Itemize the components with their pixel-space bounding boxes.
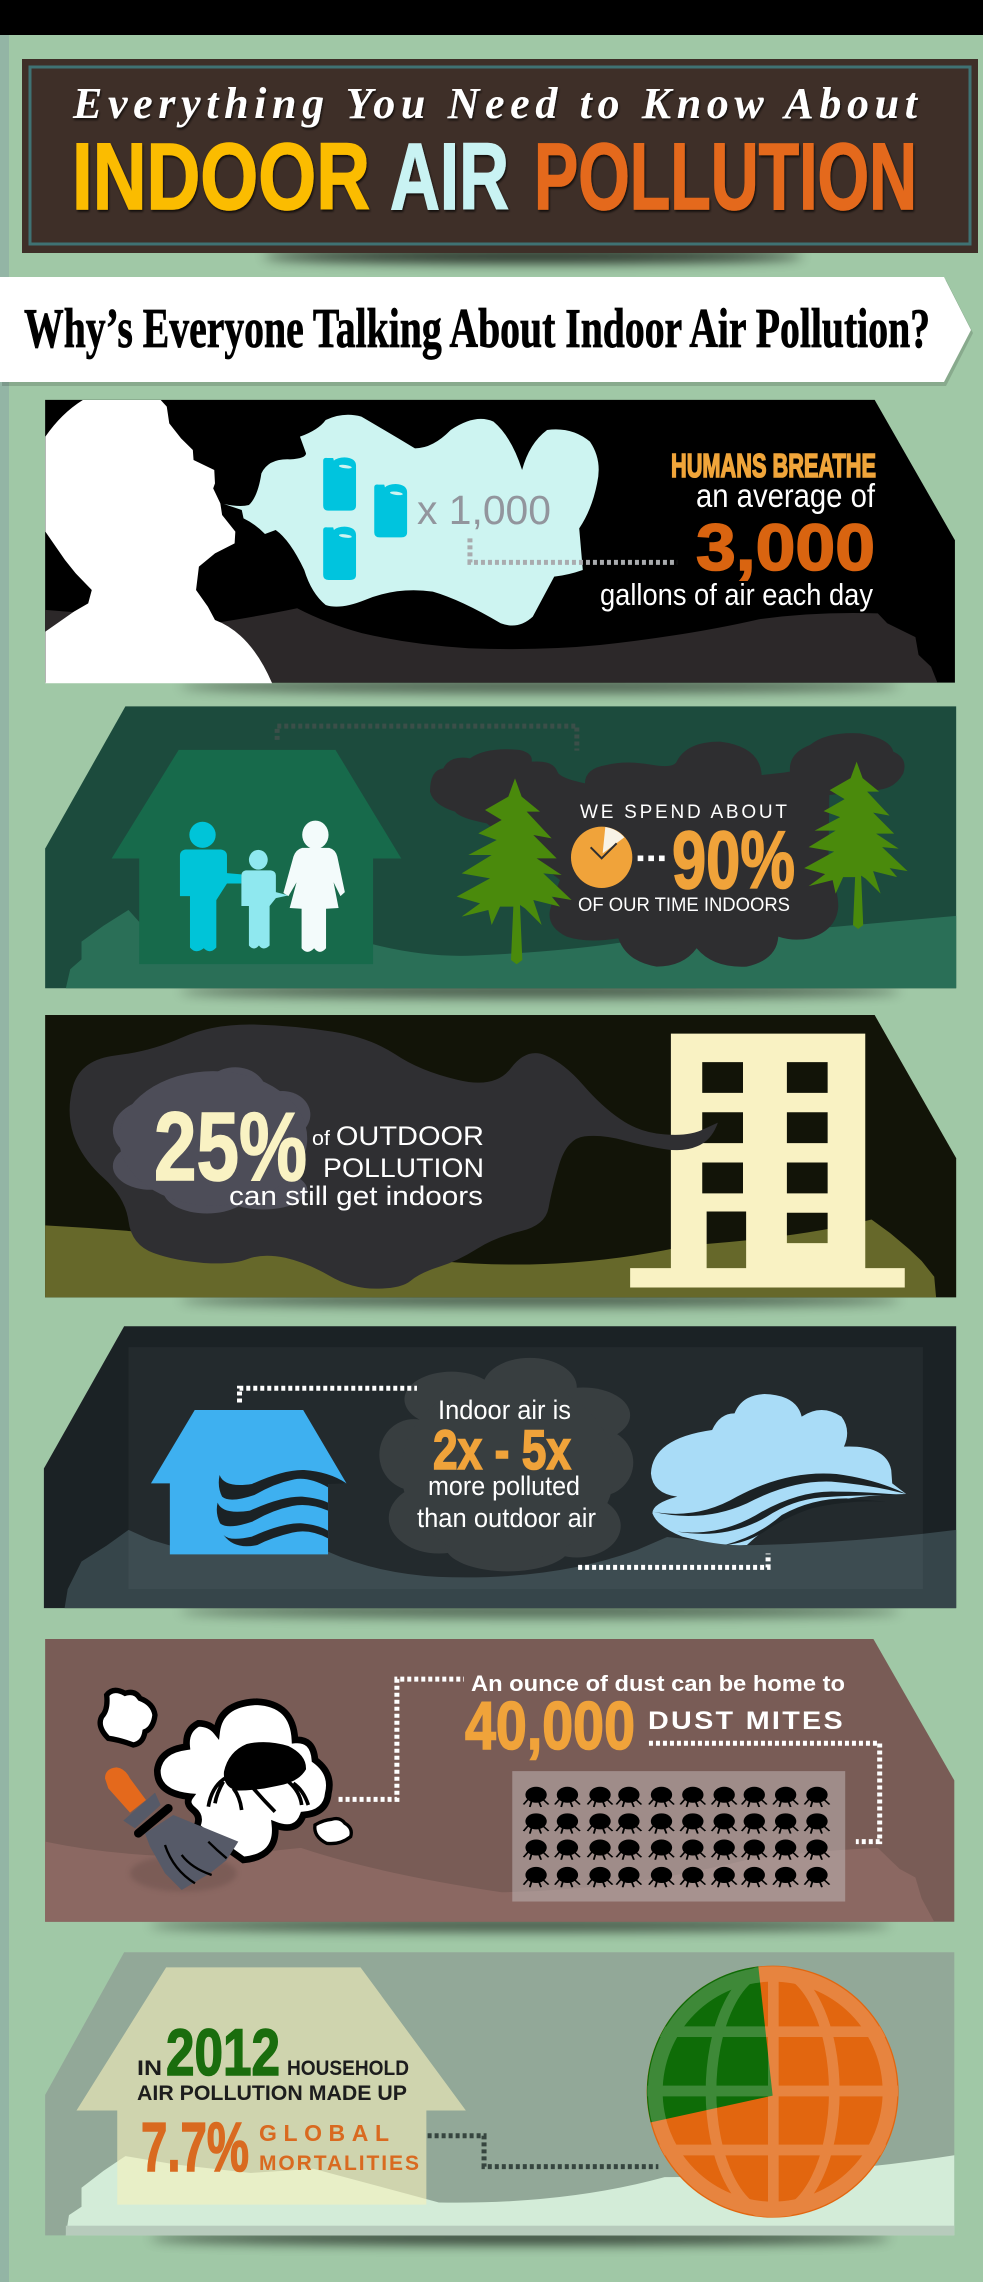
house bbox=[112, 750, 401, 964]
ground bbox=[45, 1219, 936, 1297]
ground bbox=[45, 608, 937, 683]
wind swooshes bbox=[652, 1473, 906, 1545]
text: household: HOUSEHOLD bbox=[287, 2057, 409, 2080]
title line 2: INDOOR bbox=[72, 124, 370, 230]
inner panel bbox=[129, 1347, 923, 1589]
clock icon bbox=[571, 827, 632, 888]
dotted connectors bbox=[240, 1388, 417, 1403]
dotted connector bbox=[470, 538, 677, 562]
woman bbox=[283, 821, 345, 952]
text: mortalities: MORTALITIES bbox=[259, 2152, 419, 2175]
broom shadow bbox=[130, 1855, 237, 1892]
number: 3,000: 3,000 bbox=[696, 510, 875, 584]
house waves bbox=[217, 1470, 346, 1546]
small puff right bbox=[315, 1819, 351, 1844]
number: 25%: 25% bbox=[154, 1092, 307, 1201]
title line 2: AIR bbox=[390, 124, 509, 230]
inner cloud bbox=[113, 1067, 310, 1214]
smoke bbox=[70, 1024, 718, 1289]
house icon bbox=[151, 1410, 346, 1554]
smoke cloud bbox=[379, 1358, 633, 1571]
number: 2x-5x: 2x - 5x bbox=[433, 1418, 571, 1481]
wind cloud bbox=[651, 1394, 906, 1545]
text: dust mites: DUST MITES bbox=[648, 1707, 845, 1735]
globe bbox=[647, 1966, 899, 2218]
text: we spend: WE SPEND ABOUT bbox=[580, 802, 787, 823]
panel 5: dust mites bbox=[45, 1639, 954, 1931]
title line 1: Everything You Need to Know About bbox=[72, 79, 919, 128]
text: indoor air is: Indoor air is bbox=[438, 1395, 571, 1425]
text: global: GLOBAL bbox=[259, 2120, 389, 2146]
silhouette bbox=[45, 400, 272, 683]
smoke cloud bbox=[430, 733, 905, 967]
text: gallons: gallons of air each day bbox=[600, 577, 873, 612]
text: an ounce: An ounce of dust can be home to bbox=[471, 1671, 845, 1696]
title line 2 bbox=[72, 124, 917, 230]
dotted connector bbox=[277, 726, 577, 751]
house bbox=[76, 1967, 466, 2205]
tree right bbox=[804, 762, 908, 929]
text: can still: can still get indoors bbox=[229, 1181, 483, 1211]
breath cloud bbox=[224, 415, 599, 626]
text: humans breathe: HUMANS BREATHE bbox=[671, 447, 876, 484]
dots bbox=[638, 850, 666, 867]
panel 6: global mortalities bbox=[45, 1952, 954, 2244]
number: 40,000: 40,000 bbox=[465, 1688, 635, 1764]
panel 2: time indoors bbox=[45, 706, 956, 997]
panel 4: more polluted bbox=[44, 1326, 956, 1617]
text: more polluted: more polluted bbox=[428, 1471, 580, 1501]
man bbox=[180, 822, 241, 951]
ground bbox=[66, 910, 956, 988]
number: 7.7%: 7.7% bbox=[141, 2108, 249, 2186]
mite grid bbox=[512, 1771, 845, 1902]
dust cloud bbox=[157, 1702, 329, 1860]
large mite bbox=[208, 1742, 308, 1812]
broom bbox=[105, 1767, 238, 1890]
dotted connectors bbox=[339, 1679, 464, 1799]
text: pollution: POLLUTION bbox=[323, 1153, 484, 1183]
text: air pollution: AIR POLLUTION MADE UP bbox=[137, 2082, 407, 2105]
text: in: IN bbox=[137, 2057, 162, 2080]
jugs bbox=[323, 457, 407, 580]
multiplier text: x 1,000 bbox=[417, 487, 551, 533]
panel 3: outdoor pollution bbox=[45, 1015, 956, 1306]
number: 90%: 90% bbox=[672, 815, 795, 906]
dotted connector bbox=[428, 2136, 658, 2167]
text: an average of: an average of bbox=[696, 477, 876, 514]
text: time indoors: OF OUR TIME INDOORS bbox=[578, 895, 790, 916]
panel 1: breathing bbox=[45, 400, 955, 692]
ribbon heading bbox=[0, 277, 973, 386]
text: of outdoor: of OUTDOOR bbox=[312, 1121, 484, 1151]
building bbox=[630, 1034, 905, 1287]
ground bbox=[65, 1530, 956, 1608]
child bbox=[241, 850, 288, 949]
ground bbox=[45, 1842, 934, 1922]
tree left bbox=[457, 778, 572, 964]
number: 2012: 2012 bbox=[166, 2015, 280, 2089]
header panel bbox=[22, 59, 978, 263]
ground bbox=[66, 2155, 954, 2235]
text: than outdoor: than outdoor air bbox=[417, 1503, 596, 1533]
small puff left bbox=[100, 1690, 155, 1745]
